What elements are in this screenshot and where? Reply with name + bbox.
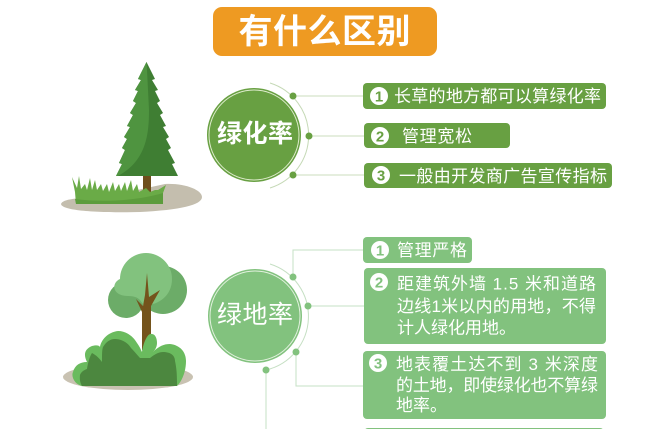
item 2: setback rule: 计人绿化用地。 xyxy=(397,318,516,338)
item 3: soil depth rule: 3 xyxy=(374,356,382,372)
item 1: 长草的地方都可以算绿化率 xyxy=(363,83,606,109)
item 2: setback rule: 2 xyxy=(375,274,383,292)
item 2: 管理宽松: 管理宽松 xyxy=(402,127,472,146)
item 1: 长草的地方都可以算绿化率: 1 xyxy=(375,88,383,106)
connector lines: green rate xyxy=(270,83,364,188)
item 2: setback rule: 边线1米以内的用地，不得 xyxy=(397,297,596,316)
item 1: 管理严格: 1 xyxy=(376,242,384,260)
item 2: 管理宽松: 2 xyxy=(376,128,384,146)
item 4: cropped box xyxy=(364,428,604,429)
item 3: 一般由开发商广告宣传指标: 一般由开发商广告宣传指标 xyxy=(399,167,607,186)
item 3: soil depth rule: 地率。 xyxy=(396,396,447,415)
badge: 绿化率: 绿化率 xyxy=(217,120,293,148)
item 3: soil depth rule: 的土地，即使绿化也不算绿 xyxy=(396,375,598,395)
item 2: setback rule xyxy=(364,268,606,344)
icon: round tree with bush xyxy=(63,253,193,390)
title banner: 有什么区别 xyxy=(238,13,410,51)
title banner xyxy=(213,7,437,56)
item 3: soil depth rule: 地表覆土达不到 3 米深度 xyxy=(396,355,598,374)
badge: 绿地率: 绿地率 xyxy=(217,301,293,329)
item 1: 管理严格 xyxy=(363,237,472,263)
item 2: setback rule: 距建筑外墙 1.5 米和道路 xyxy=(397,274,596,294)
item 3: soil depth rule xyxy=(363,351,606,419)
item 2: 管理宽松 xyxy=(364,123,510,148)
badge: 绿地率 xyxy=(208,269,302,363)
badge: 绿化率 xyxy=(207,88,301,182)
item 1: 管理严格: 管理严格 xyxy=(397,241,467,260)
icon: pine tree with grass xyxy=(61,60,202,212)
connector lines: greenland rate xyxy=(262,250,364,429)
item 1: 长草的地方都可以算绿化率: 长草的地方都可以算绿化率 xyxy=(394,87,601,106)
item 3: 一般由开发商广告宣传指标 xyxy=(364,163,612,188)
item 3: 一般由开发商广告宣传指标: 3 xyxy=(377,168,385,184)
